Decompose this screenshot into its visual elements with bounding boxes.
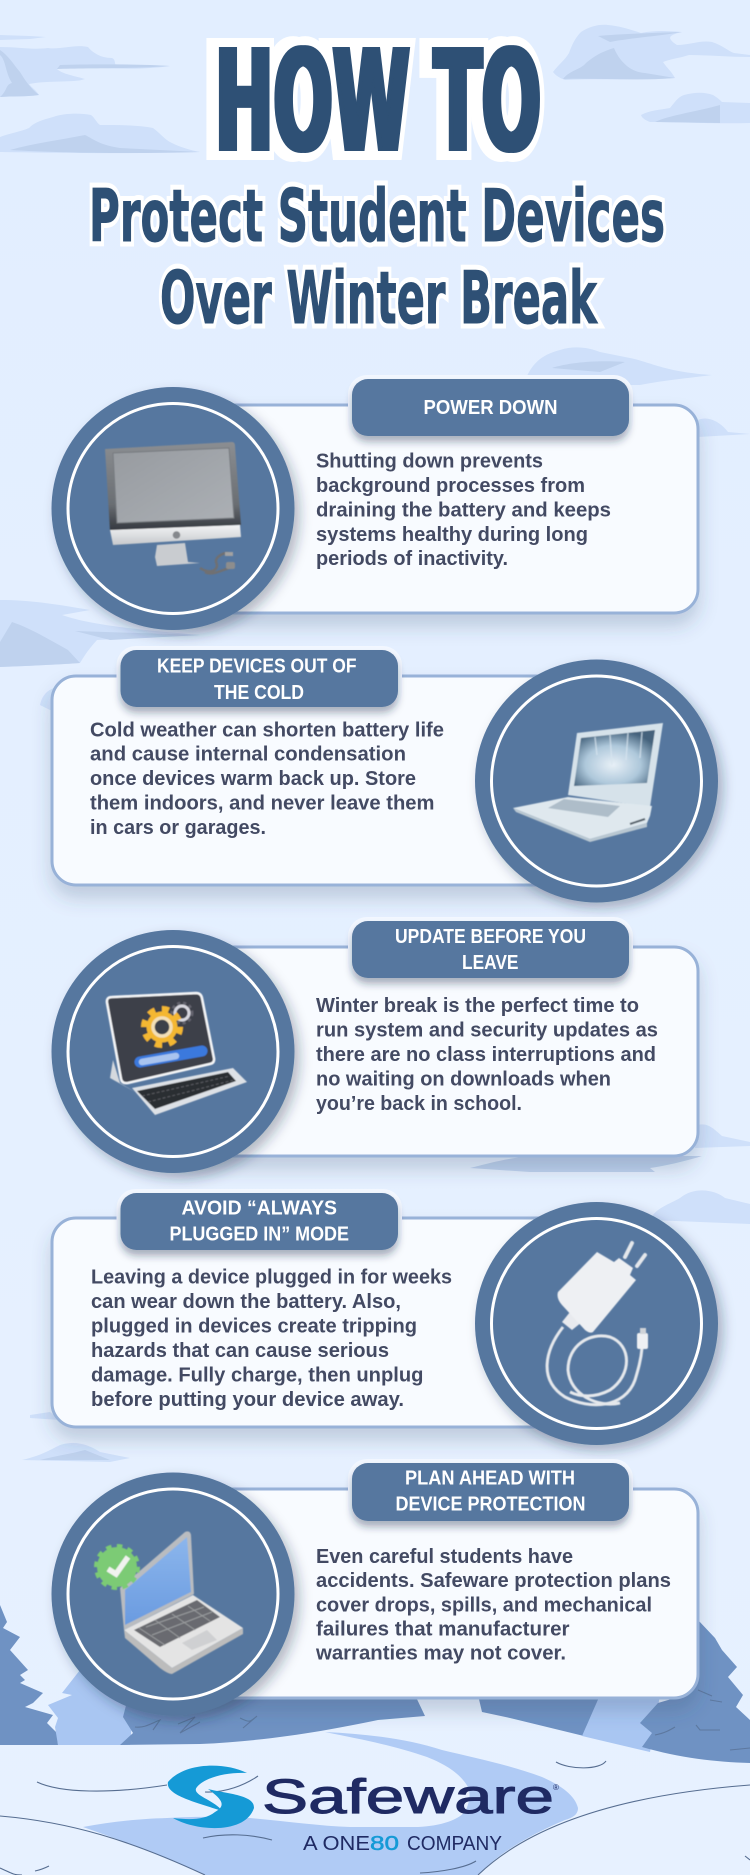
icon circle (52, 930, 294, 1173)
heading: avoid always plugged in mode (116, 1189, 402, 1254)
panel: update before you leave (52, 917, 698, 1173)
heading: power down: POWER DOWN (424, 397, 558, 419)
card (173, 947, 698, 1156)
body text: you’re back in school. (316, 1092, 522, 1115)
panel: avoid always plugged in mode (52, 1189, 718, 1445)
tagline: A ONE (303, 1833, 370, 1855)
body text: damage. Fully charge, then unplug (91, 1364, 424, 1386)
body text (315, 1545, 671, 1665)
wordmark: Safeware (262, 1771, 554, 1824)
body text: and cause internal condensation (90, 742, 406, 766)
body text: periods of inactivity. (316, 547, 508, 570)
body text: run system and security updates as (316, 1019, 658, 1042)
icon: desktop monitor (105, 442, 241, 573)
heading: plan ahead with device protection (348, 1459, 633, 1525)
heading: keep devices out of the cold (116, 646, 402, 711)
light tree (48, 1670, 135, 1745)
body text: Cold weather can shorten battery life (90, 718, 444, 741)
icon circle (52, 387, 294, 630)
icon: laptop with check badge (96, 1531, 243, 1674)
heading: plan ahead with device protection: PLAN AHEAD WITH (405, 1468, 575, 1490)
body text: can wear down the battery. Also, (91, 1290, 401, 1313)
registered mark: ® (553, 1783, 559, 1792)
body text: failures that manufacturer (316, 1618, 570, 1641)
body text: background processes from (316, 474, 585, 497)
icon circle (52, 1472, 294, 1716)
logo mark (168, 1766, 254, 1828)
heading: avoid always plugged in mode: PLUGGED IN” MODE (170, 1224, 349, 1246)
heading: power down (348, 375, 633, 440)
panel: plan ahead with device protection (52, 1459, 698, 1716)
body text: hazards that can cause serious (91, 1339, 389, 1362)
body text: Winter break is the perfect time to (316, 994, 639, 1017)
icon: tablet with gear (107, 993, 247, 1115)
body text: them indoors, and never leave them (90, 792, 434, 814)
subtitle (89, 174, 665, 340)
body text: Even careful students have (316, 1545, 573, 1568)
body text: no waiting on downloads when (316, 1068, 611, 1091)
card (173, 405, 698, 613)
body text: plugged in devices create tripping (91, 1314, 417, 1338)
body text: Shutting down prevents (316, 450, 543, 473)
body text: there are no class interruptions and (316, 1043, 656, 1066)
tagline (303, 1833, 502, 1855)
heading: update before you leave: UPDATE BEFORE YOU (395, 926, 586, 948)
heading: avoid always plugged in mode: AVOID “ALWAYS (182, 1198, 337, 1220)
body text (316, 450, 611, 570)
body text: systems healthy during long (316, 523, 588, 546)
light path through snow (83, 1732, 578, 1875)
logo: Safeware (168, 1766, 559, 1855)
centre tree band (120, 1690, 425, 1745)
icon circle (475, 1202, 718, 1445)
body text: before putting your device away. (91, 1388, 404, 1411)
card (173, 1489, 698, 1698)
card (52, 676, 597, 885)
body text: Leaving a device plugged in for weeks (91, 1266, 452, 1288)
card (52, 1218, 597, 1427)
left tree (0, 1605, 58, 1745)
winter trees and snowy ground (0, 1605, 750, 1875)
right tree (640, 1620, 750, 1763)
right centre tree (478, 1695, 615, 1737)
body text: warranties may not cover. (315, 1642, 566, 1665)
heading: keep devices out of the cold: KEEP DEVICES OUT OF (157, 656, 356, 678)
tagline: COMPANY (407, 1833, 502, 1855)
heading: update before you leave: LEAVE (462, 952, 518, 974)
title: HOW TO (205, 21, 543, 184)
tagline: 80 (370, 1833, 399, 1855)
icon: charger and cable (547, 1243, 648, 1405)
panel: keep devices out of the cold (52, 646, 718, 902)
body text (316, 994, 658, 1115)
clouds (0, 25, 750, 1462)
heading: update before you leave (348, 917, 633, 982)
body text: draining the battery and keeps (316, 498, 611, 521)
heading: plan ahead with device protection: DEVICE PROTECTION (396, 1494, 586, 1516)
right light patch (582, 1695, 660, 1752)
body text: once devices warm back up. Store (90, 767, 416, 790)
heading: keep devices out of the cold: THE COLD (214, 682, 304, 704)
body text: cover drops, spills, and mechanical (316, 1593, 652, 1616)
icon circle (475, 660, 718, 902)
body text (91, 1266, 452, 1411)
body text: accidents. Safeware protection plans (316, 1569, 671, 1592)
body text (90, 718, 444, 839)
snow sketch lines (0, 1690, 750, 1875)
icon: frozen laptop (513, 723, 663, 842)
panel: power down (52, 375, 698, 630)
body text: in cars or garages. (90, 816, 266, 839)
